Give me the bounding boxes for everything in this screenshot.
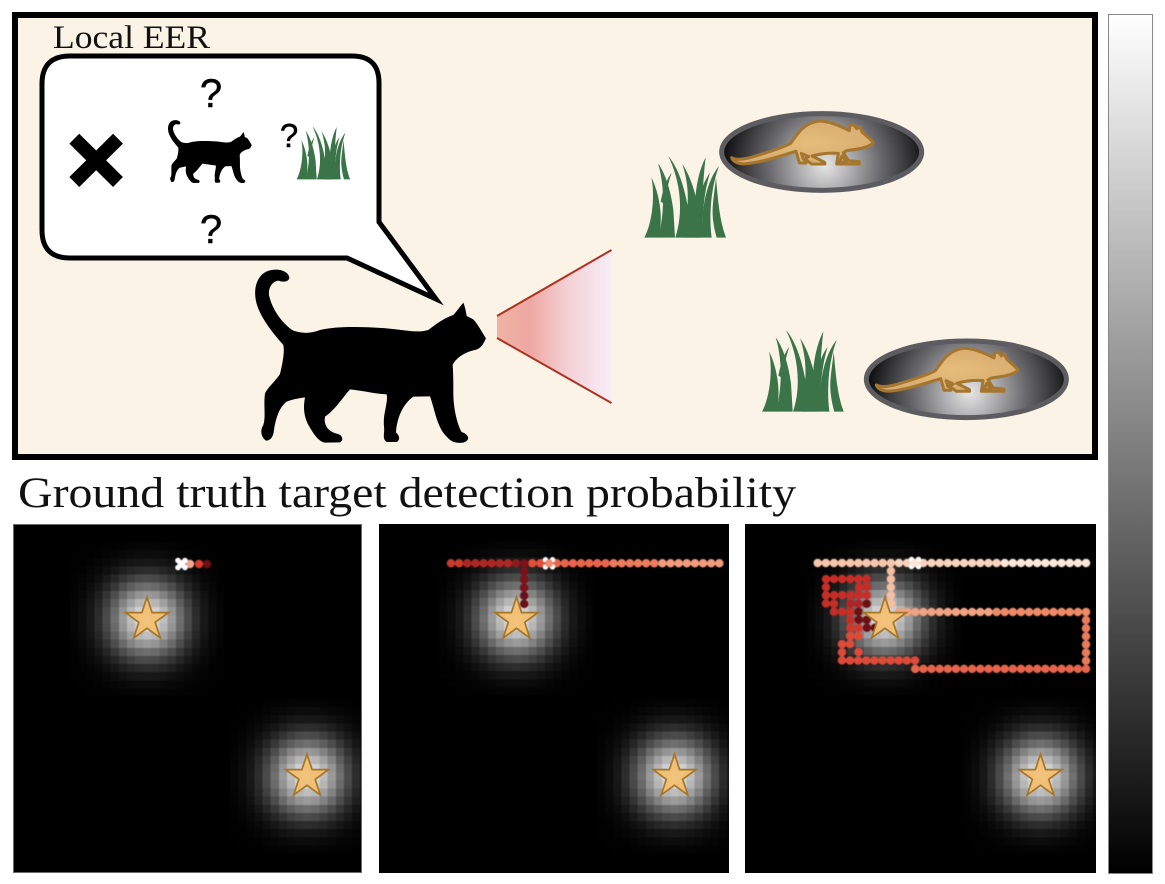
icon: cross: [74, 139, 118, 182]
target glow 2: [597, 699, 751, 853]
scene frame: [15, 15, 1095, 457]
icon: upper grass: [644, 156, 726, 238]
target glow 1: [807, 541, 961, 695]
star marker 1: [495, 597, 538, 638]
upper burrow with rat: [722, 114, 922, 190]
star marker 2: [1019, 754, 1062, 795]
question mark: by grass: ?: [280, 117, 298, 154]
heading: ground truth: Ground truth target detection probability: [18, 470, 797, 517]
colorbar: [1108, 14, 1153, 874]
icon: small grass: [297, 126, 350, 179]
star marker 2: [653, 754, 696, 795]
star marker 2: [286, 754, 328, 795]
panel: heatmap step 2: [379, 524, 729, 873]
panel: heatmap step 3: [745, 524, 1096, 873]
icon: rat: [876, 348, 1018, 391]
target glow 1: [70, 542, 224, 696]
question mark: top: ?: [200, 72, 222, 116]
trajectory and stars: [446, 556, 724, 797]
heading: Local EER: Local EER: [53, 20, 210, 56]
target glow 1: [439, 541, 593, 695]
vision cone: [497, 250, 612, 403]
icon: lower grass: [762, 330, 844, 412]
target glow 2: [230, 699, 384, 853]
icon: rat: [732, 121, 873, 164]
icon: small cat: [168, 120, 252, 183]
panel: heatmap step 1: [13, 524, 362, 873]
trajectory dots: [818, 557, 1087, 669]
main scene panel: [12, 12, 1098, 460]
trajectory and stars: [13, 524, 362, 873]
target glow 2: [963, 699, 1117, 853]
trajectory dots: [451, 557, 720, 605]
star marker 1: [864, 597, 906, 638]
star marker 1: [126, 597, 168, 638]
trajectory and stars: [812, 556, 1091, 797]
question mark: bottom: ?: [200, 208, 222, 252]
icon: cat: [255, 270, 486, 443]
trajectory dots: [175, 558, 211, 570]
lower burrow with rat: [866, 341, 1066, 418]
speech bubble: [42, 56, 436, 299]
